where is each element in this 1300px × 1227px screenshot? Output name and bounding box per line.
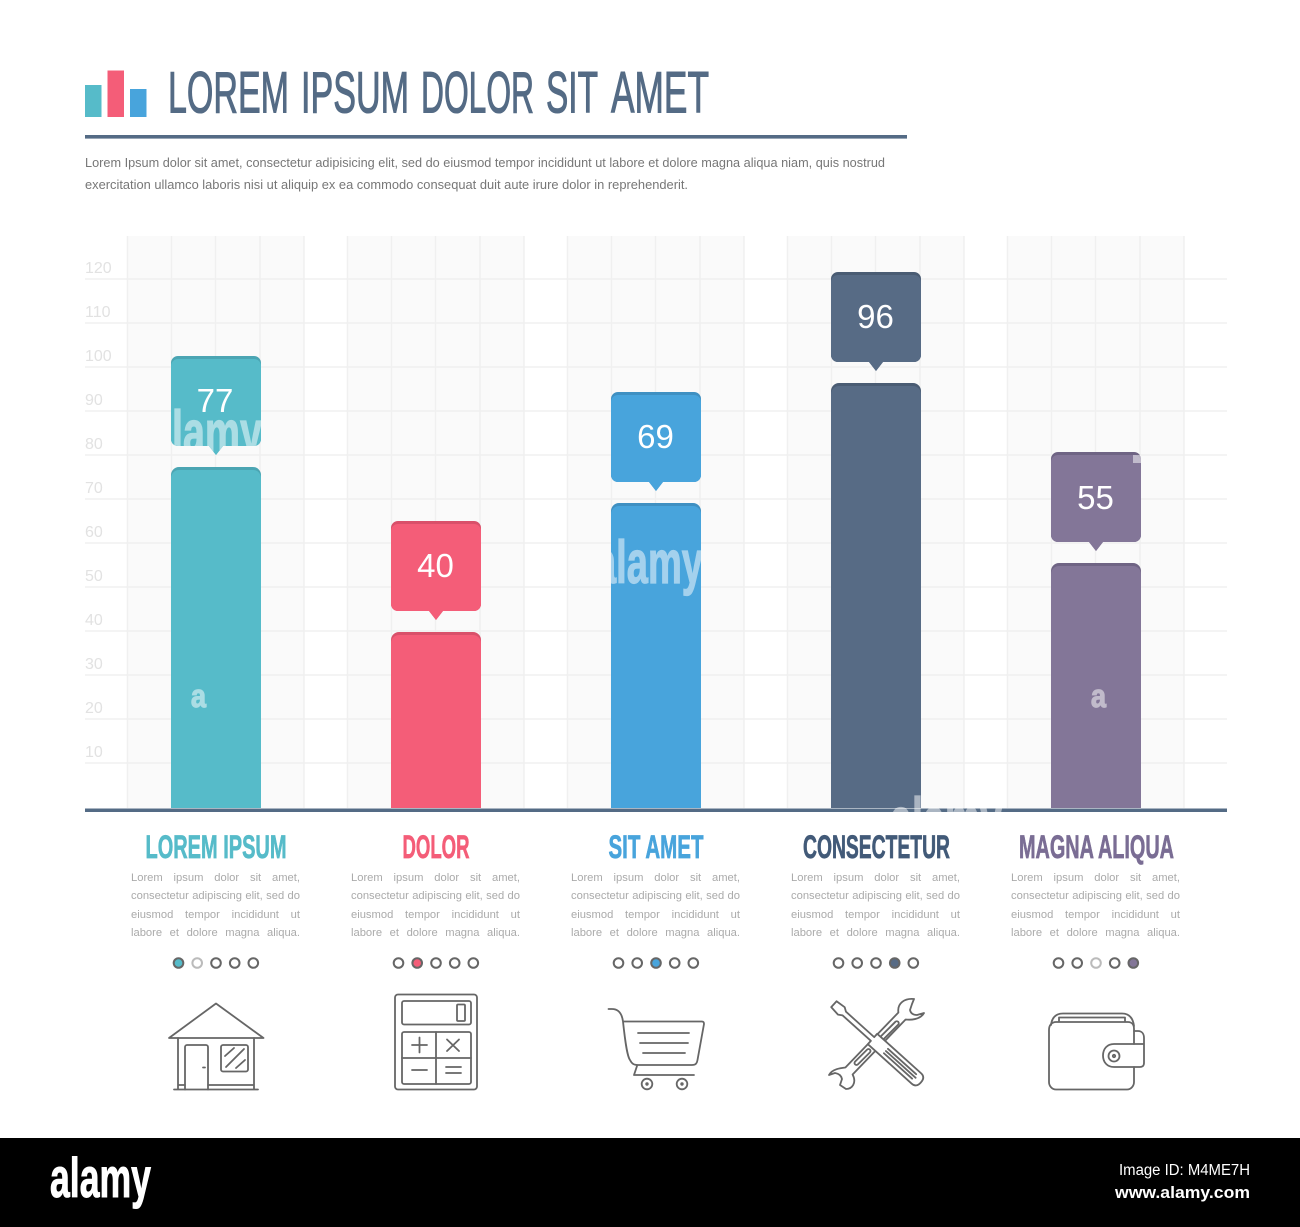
intro text: exercitation ullamco laboris nisi ut aliquip ex ea commodo consequat duit aute irure dolor in reprehenderit. [85,178,688,192]
heading: CONSECTETUR [803,829,950,865]
column: sit amet [571,829,741,1089]
footer band [0,1138,1300,1227]
bar: consectetur 96 [831,272,921,808]
text block: consectetur adipiscing elit, sed do [131,890,300,902]
x axis [85,808,1227,812]
pagination dots [394,958,478,968]
pagination dots [174,958,258,968]
text block [1011,869,1181,945]
text block: eiusmod tempor incididunt ut [571,909,740,921]
callout: 55 [1051,452,1141,551]
pagination dots [834,958,918,968]
callout: 96 [831,272,921,371]
callout: 69: 69 [637,418,674,455]
icon: shopping cart [608,1009,704,1089]
text block: Lorem ipsum dolor sit amet, [791,872,960,884]
text block: labore et dolore magna aliqua. [791,927,960,939]
text block: labore et dolore magna aliqua. [1011,927,1180,939]
watermark overlays: alamy [890,786,1002,853]
text block [571,869,741,945]
column: dolor [351,829,521,1090]
icon: house [169,1004,264,1090]
y axis labels: 60 [85,524,103,541]
intro text [85,156,885,192]
callout: 77: 77 [197,382,233,419]
heading: MAGNA ALIQUA [1019,829,1174,865]
text block: Lorem ipsum dolor sit amet, [1011,872,1180,884]
icon: calculator [395,994,477,1090]
text block: labore et dolore magna aliqua. [131,927,300,939]
intro text: Lorem Ipsum dolor sit amet, consectetur adipisicing elit, sed do eiusmod tempor incididunt ut labore et dolore magna aliqua niam, quis nostrud [85,156,885,170]
text block [131,869,301,945]
y axis labels: 30 [85,656,103,673]
callout: 40: 40 [417,547,454,584]
text block [791,869,961,945]
y axis labels: 10 [85,744,103,761]
text block: Lorem ipsum dolor sit amet, [131,872,300,884]
icon: wrench and screwdriver [829,999,926,1089]
callout: 96: 96 [857,298,894,335]
y axis labels: 70 [85,480,103,497]
chart background grid [85,236,1227,808]
image id: Image ID: M4ME7H [1119,1162,1250,1179]
bar: sit amet 69 [611,392,701,808]
header [85,60,907,192]
callout: 55: 55 [1077,479,1114,516]
bar: lorem ipsum 77 [171,356,261,808]
y axis labels: 20 [85,700,103,717]
title: IPSUM [301,60,409,126]
column: consectetur [791,829,961,1089]
column: magna aliqua [1011,829,1181,1090]
icon: bar chart logo [85,70,146,117]
text block: consectetur adipiscing elit, sed do [571,890,740,902]
callout: 40 [391,521,481,620]
y axis labels: 80 [85,436,103,453]
text block: eiusmod tempor incididunt ut [351,909,520,921]
text block: labore et dolore magna aliqua. [351,927,520,939]
bar: magna aliqua 55 [1051,452,1141,808]
text block: eiusmod tempor incididunt ut [1011,909,1180,921]
text block: eiusmod tempor incididunt ut [131,909,300,921]
heading: SIT AMET [608,829,704,865]
callout: 69 [611,392,701,491]
text block: Lorem ipsum dolor sit amet, [571,872,740,884]
y axis labels: 100 [85,348,112,365]
title [168,60,709,126]
watermark overlays: alamy [595,529,703,596]
title: LOREM [168,60,289,126]
callout: 77 [171,356,261,455]
watermark overlays: a [191,678,206,714]
watermark overlays: alamy [150,399,262,466]
text block: labore et dolore magna aliqua. [571,927,740,939]
text block: consectetur adipiscing elit, sed do [1011,890,1180,902]
pagination dots [1054,958,1138,968]
text block: Lorem ipsum dolor sit amet, [351,872,520,884]
text block: eiusmod tempor incididunt ut [791,909,960,921]
title: SIT [546,60,598,126]
title: DOLOR [421,60,534,126]
pagination dots [614,958,698,968]
y axis labels: 110 [85,304,111,321]
heading: LOREM IPSUM [146,829,286,865]
watermark overlays [150,399,1141,853]
title: AMET [611,60,709,126]
icon: wallet [1049,1014,1144,1090]
y axis labels: 40 [85,612,103,629]
heading: DOLOR [402,829,470,865]
y axis labels: 50 [85,568,103,585]
text block: consectetur adipiscing elit, sed do [351,890,520,902]
y axis labels: 90 [85,392,103,409]
y axis labels [85,260,112,761]
text block: consectetur adipiscing elit, sed do [791,890,960,902]
text block [351,869,521,945]
bar: dolor 40 [391,521,481,808]
y axis labels: 120 [85,260,112,277]
watermark overlays: a [1091,678,1106,714]
website: www.alamy.com [1114,1183,1250,1202]
alamy logo: alamy [50,1146,151,1209]
column: lorem ipsum [131,829,301,1090]
